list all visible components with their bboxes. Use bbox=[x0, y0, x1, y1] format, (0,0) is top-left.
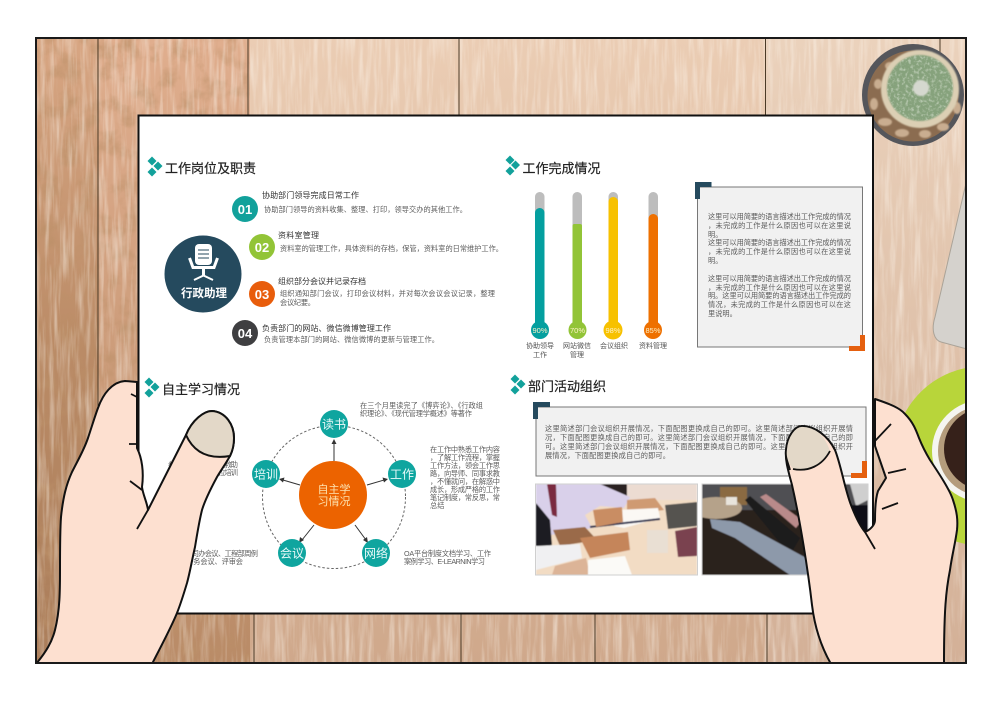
item 02: 资料室的管理工作，具体资料的存档，保管，资料室的日常维护工作。 bbox=[280, 244, 503, 253]
item 02 bbox=[249, 230, 503, 260]
text box: activities bbox=[533, 402, 867, 478]
icon: coffee cup bbox=[932, 403, 965, 499]
bar 98%: 98% bbox=[605, 326, 621, 335]
icon: heading diamonds 2 bbox=[506, 156, 520, 176]
note: meeting: 会、财务会议、评审会 bbox=[172, 557, 243, 566]
item 01: 协助部门领导完成日常工作 bbox=[262, 190, 359, 200]
heading: activities: 部门活动组织 bbox=[528, 379, 606, 394]
note: network: 案例学习、E-LEARNIN学习 bbox=[404, 557, 485, 566]
icon: green saucer bbox=[905, 368, 965, 544]
note: work: 成长，形成严格的工作 bbox=[430, 485, 500, 494]
text box: activities: 况，下面配图更换成自己的即可。这里简述部门会议组织开展情况，下面配图更换成自己的即 bbox=[545, 433, 853, 442]
arrows bbox=[279, 439, 388, 543]
item 04: 负责部门的网站、微信微博管理工作 bbox=[262, 323, 391, 333]
icon: office chair bbox=[190, 244, 218, 280]
icon: left thumb nail bbox=[186, 411, 234, 457]
node: work: 工作 bbox=[390, 468, 414, 482]
icon: heading diamonds 4 bbox=[510, 374, 526, 394]
text box: activities: 这里简述部门会议组织开展情况，下面配图更换成自己的即可。这里简述部门会议组织开展情 bbox=[545, 424, 853, 433]
note: work: ，不懂就问，在解惑中 bbox=[430, 477, 500, 486]
item 02: 资料室管理 bbox=[278, 230, 319, 240]
desk objects bbox=[862, 44, 965, 544]
node: work bbox=[388, 460, 416, 488]
text box: completion notes: ，未完成的工作是什么原因也可以在这里说 bbox=[708, 221, 851, 230]
note: work: ，了解工作流程，掌握 bbox=[430, 453, 500, 462]
bar 98%: 会议组织 bbox=[600, 341, 628, 350]
note: meeting bbox=[172, 549, 258, 566]
item 03: 组织通知部门会议，打印会议材料，并对每次会议会议记录，整理 bbox=[280, 289, 495, 298]
item 01: 协助部门领导的资料收集、整理、打印，领导交办的其他工作。 bbox=[264, 205, 467, 214]
note: training bbox=[168, 460, 238, 477]
text box: completion notes: 明。 bbox=[708, 230, 722, 239]
note: meeting: 参加公司办会议、工程部周例 bbox=[172, 549, 258, 558]
note: work: 笔记制度，常反思，常 bbox=[430, 493, 500, 502]
item 03: 组织部分会议并记录存档 bbox=[278, 276, 366, 286]
item 04: 04 bbox=[238, 326, 253, 341]
bar 90%: 协助领导 bbox=[526, 341, 554, 350]
text box: completion notes: 情况，未完成的工作是什么原因也可以在这 bbox=[708, 300, 851, 309]
admin assistant circle bbox=[164, 236, 242, 312]
panel: work completion bbox=[506, 156, 865, 359]
bar 70%: 管理 bbox=[570, 350, 584, 359]
item 02: 02 bbox=[255, 240, 269, 255]
thermometer chart bbox=[526, 192, 667, 359]
paper sheet bbox=[138, 116, 873, 614]
photo: meeting hands bbox=[536, 484, 697, 575]
item 01: 01 bbox=[238, 202, 252, 217]
heading: completion: 工作完成情况 bbox=[522, 161, 600, 176]
item 03: 会议纪要。 bbox=[280, 298, 315, 307]
bar 70%: 70% bbox=[570, 326, 585, 335]
note: work bbox=[430, 445, 500, 510]
text box: completion notes: 这里可以用简要的语言描述出工作完成的情况 bbox=[708, 274, 851, 283]
note: training: 参加部门技能及岗位培训 bbox=[168, 468, 238, 477]
heading: self study: 自主学习情况 bbox=[162, 382, 240, 397]
icon: heading diamonds 3 bbox=[144, 378, 160, 398]
bar 98% bbox=[600, 192, 628, 350]
node: network: 网络 bbox=[364, 546, 388, 560]
node: meeting bbox=[278, 539, 306, 567]
item 04: 负责管理本部门的网站、微信微博的更新与管理工作。 bbox=[264, 335, 439, 344]
text box: completion notes: 这里可以用简要的语言描述出工作完成的情况 bbox=[708, 212, 851, 221]
note: work: 路，向导师、同事求教 bbox=[430, 469, 500, 478]
item 04 bbox=[232, 320, 439, 346]
note: network bbox=[404, 549, 491, 566]
right hand bbox=[786, 399, 957, 664]
panel: self study bbox=[144, 378, 500, 568]
node: training bbox=[252, 460, 280, 488]
heading: duties: 工作岗位及职责 bbox=[165, 161, 256, 176]
text box: completion notes: 里说明。 bbox=[708, 309, 737, 318]
note: work: 工作方法，领会工作思 bbox=[430, 461, 500, 470]
node: training: 培训 bbox=[254, 466, 278, 482]
note: work: 总结 bbox=[430, 501, 444, 510]
bar 70% bbox=[563, 192, 591, 359]
text box: activities: 展情况，下面配图更换成自己的即可。 bbox=[545, 451, 670, 460]
center node: 习情况 bbox=[318, 495, 350, 508]
icon: heading diamonds 1 bbox=[148, 156, 162, 176]
left hand bbox=[36, 381, 234, 664]
bar 90% bbox=[526, 192, 554, 359]
note: network: OA平台制度文档学习、工作 bbox=[404, 549, 491, 558]
center node bbox=[299, 461, 367, 529]
bar 85%: 85% bbox=[645, 326, 661, 335]
text box: completion notes: 这里可以用简要的语言描述出工作完成的情况 bbox=[708, 238, 851, 247]
note: reading bbox=[360, 401, 483, 418]
panel: job duties bbox=[148, 156, 503, 346]
photo borders bbox=[536, 484, 868, 575]
bar 70%: 网站微信 bbox=[563, 341, 591, 350]
note: work: 在工作中熟悉工作内容 bbox=[430, 445, 500, 454]
note: reading: 织理论》、《现代管理学概述》等著作 bbox=[360, 409, 472, 418]
bar 90%: 工作 bbox=[533, 350, 547, 359]
photo: folders on table bbox=[690, 484, 868, 575]
bar 85% bbox=[639, 192, 667, 350]
admin assistant circle: 行政助理 bbox=[181, 286, 227, 300]
item 03 bbox=[249, 276, 495, 307]
panel: department activities bbox=[510, 374, 868, 575]
text box: completion notes: ，未完成的工作是什么原因也可以在这里说 bbox=[708, 283, 851, 292]
node: reading bbox=[320, 410, 348, 438]
note: training: 参加公司组织的各类救助 bbox=[168, 460, 238, 469]
node: meeting: 会议 bbox=[280, 546, 304, 560]
bar 90%: 90% bbox=[532, 326, 548, 335]
cycle diagram bbox=[252, 410, 416, 568]
item 01 bbox=[232, 190, 467, 222]
item 03: 03 bbox=[255, 287, 269, 302]
bar 85%: 资料管理 bbox=[639, 341, 667, 350]
node: network bbox=[362, 539, 390, 567]
icon: cactus pot bbox=[862, 44, 964, 146]
text box: activities: 可。这里简述部门会议组织开展情况，下面配图更换成自己的即可。这里简述部门会议组织开 bbox=[545, 442, 853, 451]
icon: white cloth bbox=[933, 179, 967, 349]
icon: right thumb nail bbox=[786, 426, 830, 470]
node: reading: 读书 bbox=[322, 418, 346, 432]
text box: completion notes bbox=[695, 182, 865, 351]
text box: completion notes: 明。 bbox=[708, 256, 722, 265]
text box: completion notes: 明。这里可以用简要的语言描述出工作完成的 bbox=[708, 291, 851, 300]
note: reading: 在三个月里读完了《博弈论》、《行政组 bbox=[360, 401, 483, 410]
text box: completion notes: ，未完成的工作是什么原因也可以在这里说 bbox=[708, 247, 851, 256]
center node: 自主学 bbox=[318, 482, 350, 496]
